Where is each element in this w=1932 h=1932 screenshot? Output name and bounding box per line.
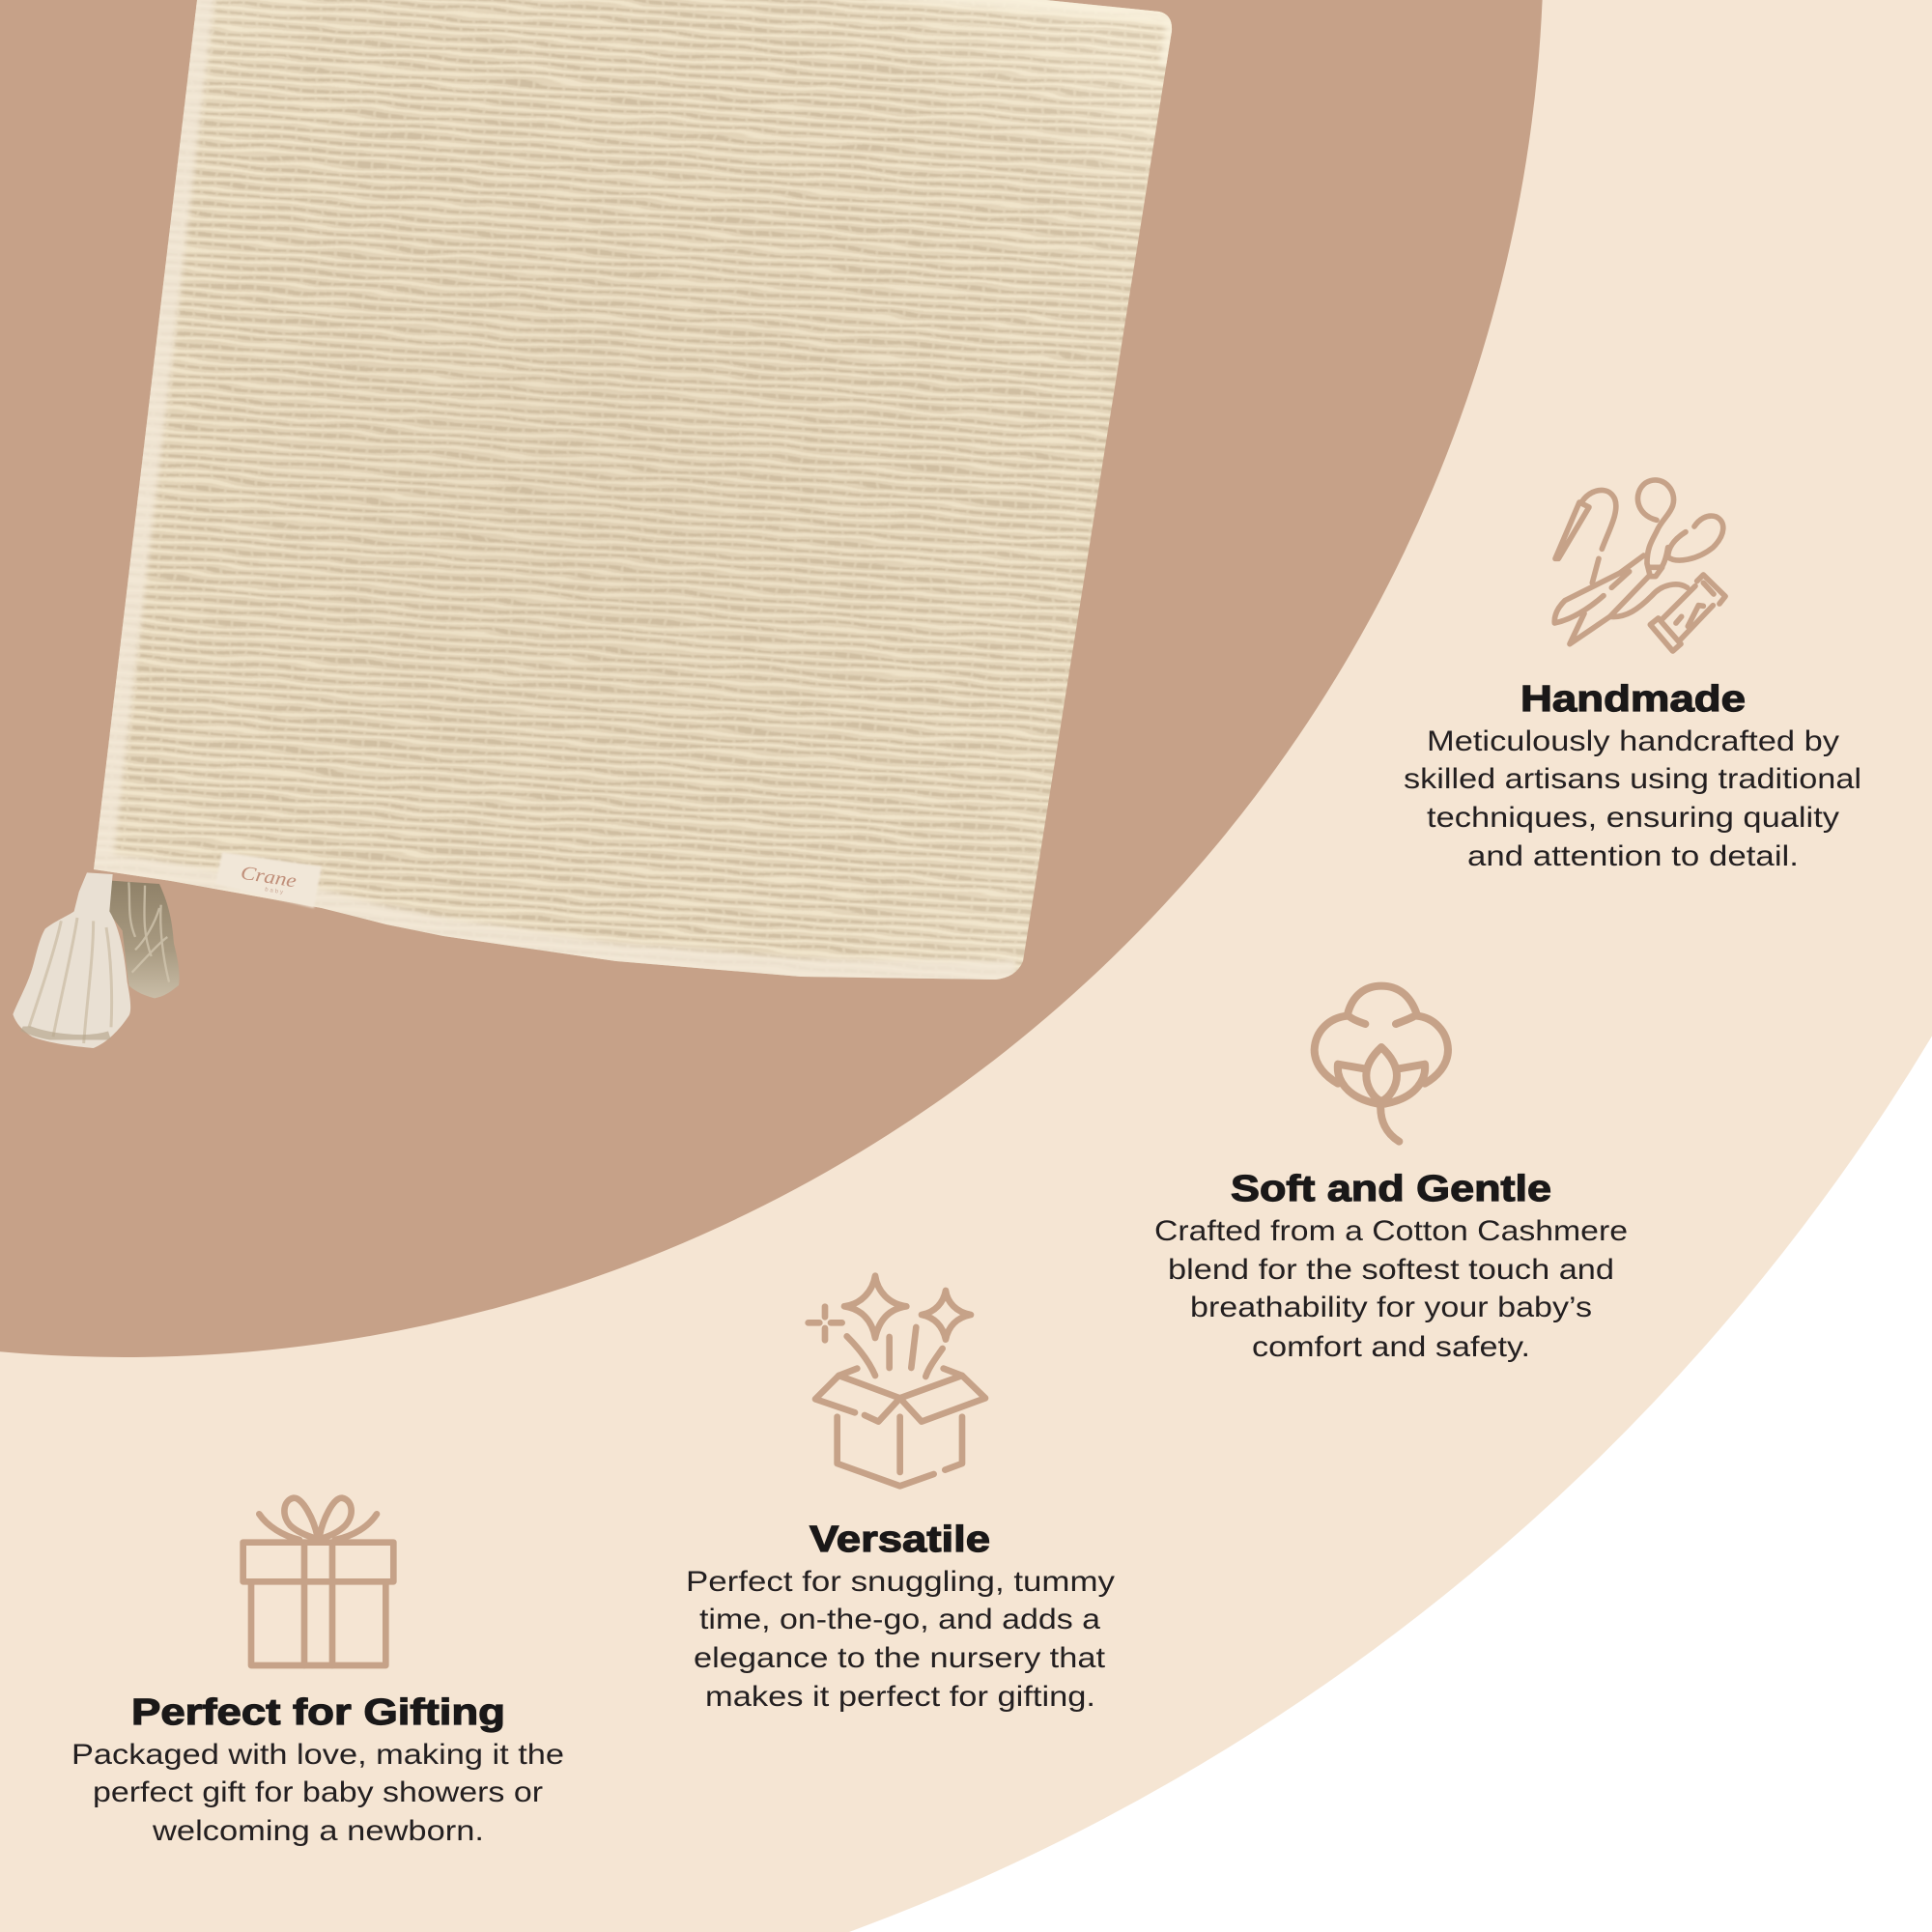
- description: [686, 1566, 1115, 1713]
- description: [71, 1739, 564, 1847]
- icon: open box with sparkles: [809, 1276, 985, 1486]
- description: welcoming a newborn.: [152, 1815, 484, 1847]
- description: Packaged with love, making it the: [71, 1739, 564, 1771]
- heading: Versatile: [810, 1520, 990, 1560]
- product photo: blanket with tassels: [13, 0, 1236, 1048]
- description: [1404, 725, 1861, 872]
- icon: scissors, needle and thread: [1554, 480, 1725, 651]
- description: breathability for your baby’s: [1190, 1292, 1592, 1323]
- feature: Versatile: [686, 1276, 1115, 1713]
- background inner circle: [0, 0, 1543, 1357]
- blanket label tag: baby: [265, 887, 285, 896]
- blanket label tag: Crane: [240, 863, 298, 892]
- feature: Handmade: [1404, 480, 1861, 872]
- description: [1154, 1215, 1628, 1363]
- description: blend for the softest touch and: [1168, 1254, 1614, 1286]
- description: time, on-the-go, and adds a: [699, 1604, 1100, 1635]
- description: elegance to the nursery that: [694, 1642, 1106, 1674]
- heading: Soft and Gentle: [1231, 1169, 1551, 1209]
- description: Perfect for snuggling, tummy: [686, 1566, 1115, 1598]
- description: makes it perfect for gifting.: [705, 1681, 1095, 1713]
- description: techniques, ensuring quality: [1427, 802, 1839, 834]
- description: Meticulously handcrafted by: [1427, 725, 1839, 757]
- description: comfort and safety.: [1252, 1331, 1530, 1363]
- blanket body: [94, 0, 1173, 980]
- heading: Handmade: [1520, 679, 1746, 720]
- icon: cotton boll: [1315, 986, 1448, 1142]
- description: skilled artisans using traditional: [1404, 763, 1861, 795]
- feature: Soft and Gentle: [1154, 986, 1628, 1363]
- blanket label tag: [215, 852, 322, 908]
- icon: gift box: [243, 1498, 393, 1665]
- description: and attention to detail.: [1467, 840, 1799, 872]
- tassel: rear: [108, 881, 180, 998]
- feature: Perfect for Gifting: [71, 1498, 564, 1847]
- tassel: front: [13, 872, 130, 1048]
- heading: Perfect for Gifting: [131, 1692, 505, 1733]
- description: Crafted from a Cotton Cashmere: [1154, 1215, 1628, 1247]
- description: perfect gift for baby showers or: [93, 1776, 543, 1808]
